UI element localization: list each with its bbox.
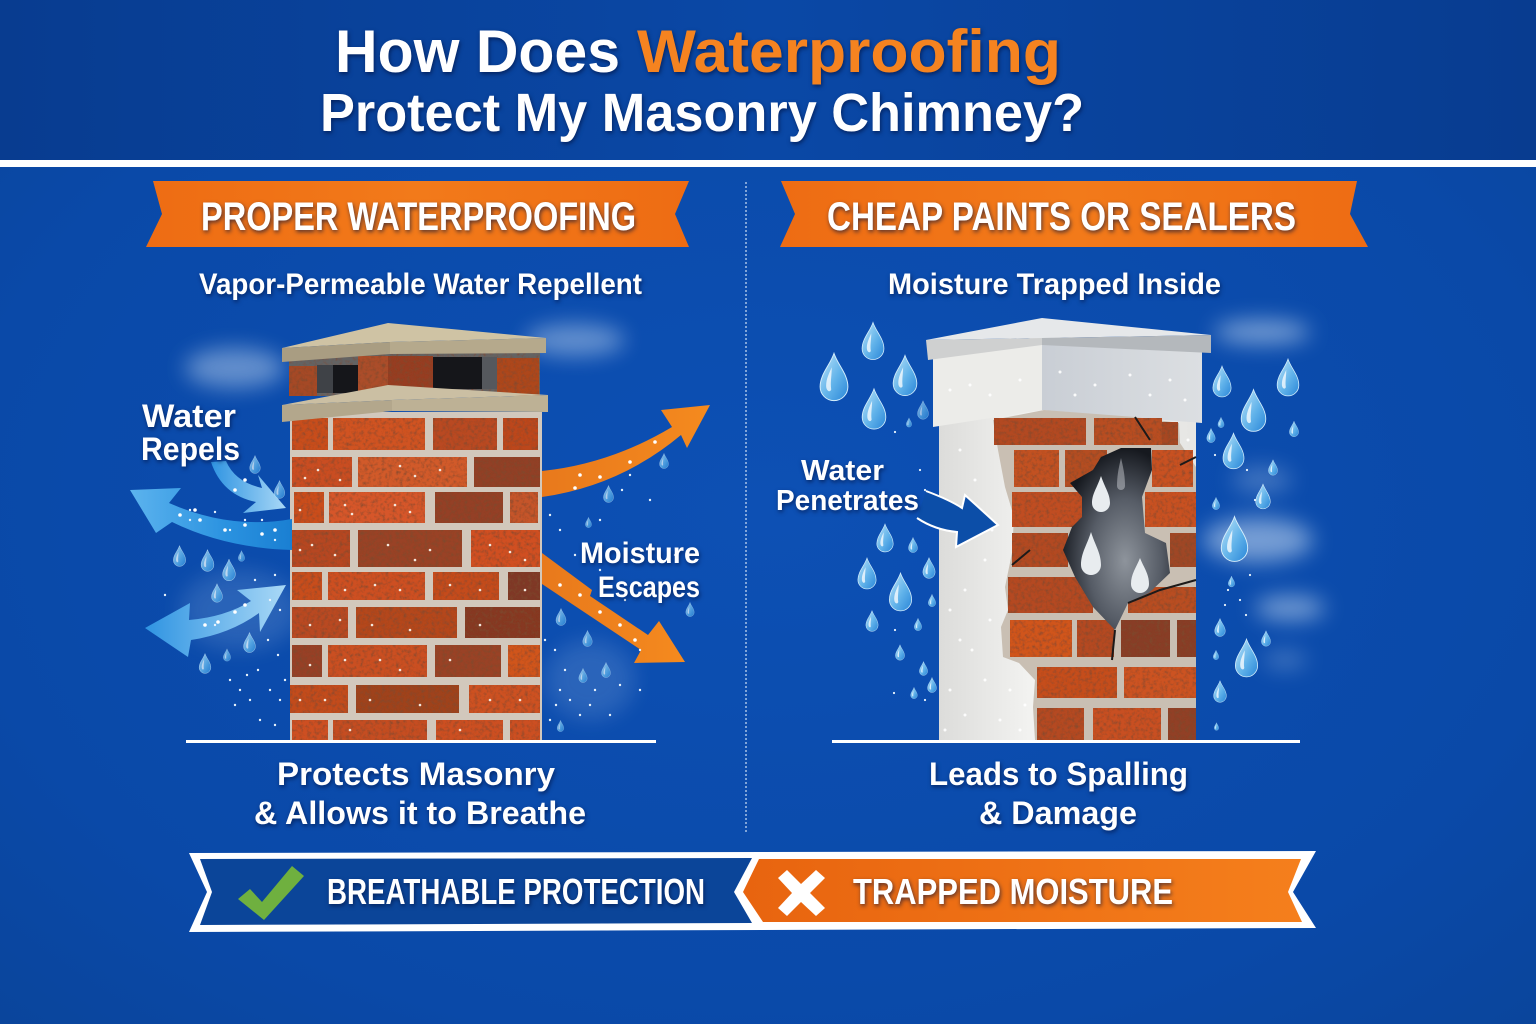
arrow: water inbound	[211, 461, 286, 513]
right caption: & Damage	[979, 795, 1137, 831]
mist behind left chimney	[180, 324, 635, 720]
bottom comparison banner	[189, 851, 1316, 932]
arrow: moisture down	[542, 553, 685, 663]
banner outline	[189, 851, 1316, 932]
bricks	[290, 418, 540, 740]
title: How Does	[335, 18, 620, 85]
label: water penetrates: Water	[801, 455, 884, 487]
label: water repels: Repels	[141, 431, 240, 467]
mist right	[1203, 320, 1325, 668]
left banner	[146, 181, 689, 247]
right banner	[780, 181, 1368, 247]
top cap	[282, 323, 546, 362]
left base line	[186, 740, 656, 743]
panel: proper waterproofing	[130, 181, 710, 831]
right base line	[832, 740, 1300, 743]
beads on arrows	[180, 442, 655, 640]
icon: check	[238, 866, 304, 920]
lower cap	[282, 385, 548, 422]
arrow: water repelled top	[130, 488, 292, 550]
icon: cross	[778, 870, 825, 916]
droplets in hole	[1081, 458, 1149, 593]
label: water penetrates: Penetrates	[776, 485, 919, 517]
cracks	[1012, 417, 1196, 660]
exposed brick area	[993, 410, 1196, 740]
rain drops right side	[1207, 359, 1299, 730]
orange segment	[743, 859, 1302, 922]
arrow: water double	[145, 585, 286, 657]
vent openings	[317, 357, 497, 393]
right banner: CHEAP PAINTS OR SEALERS	[827, 195, 1296, 239]
right caption: Leads to Spalling	[929, 756, 1188, 792]
label: moisture escapes	[580, 537, 700, 604]
left spray speckle	[165, 475, 675, 725]
left water droplets	[173, 453, 694, 732]
trapped label: TRAPPED MOISTURE	[853, 871, 1173, 912]
rain drops left side	[820, 322, 936, 699]
left caption: & Allows it to Breathe	[254, 795, 586, 831]
upper brick course	[289, 352, 540, 396]
left banner: PROPER WATERPROOFING	[201, 195, 636, 239]
left caption: Protects Masonry	[277, 756, 555, 792]
bricks right	[994, 418, 1196, 740]
label: moisture escapes: Escapes	[598, 571, 700, 604]
white body	[939, 410, 1196, 740]
left caption	[254, 756, 586, 831]
label: water repels: Water	[142, 398, 236, 434]
left labels	[141, 398, 700, 604]
right subtitle: Moisture Trapped Inside	[888, 268, 1221, 301]
header divider	[0, 160, 1536, 167]
label: moisture escapes: Moisture	[580, 537, 700, 570]
mortar body	[290, 412, 542, 740]
label: water penetrates	[776, 455, 919, 517]
right chimney	[926, 318, 1211, 740]
blue segment	[200, 858, 752, 925]
right caption	[929, 756, 1188, 831]
upper white band	[933, 336, 1202, 427]
white cap	[926, 318, 1211, 360]
center divider	[745, 182, 747, 834]
left subtitle: Vapor-Permeable Water Repellent	[199, 268, 642, 301]
breathable label: BREATHABLE PROTECTION	[327, 871, 705, 912]
beads on white paint	[945, 372, 1188, 730]
left chimney	[282, 323, 548, 740]
header band	[0, 0, 1536, 160]
rain speckle	[894, 432, 1255, 700]
title: Protect My Masonry Chimney?	[320, 83, 1084, 143]
water beads on bricks	[300, 466, 525, 730]
title	[320, 18, 1084, 143]
damage hole	[1063, 448, 1170, 630]
arrow: moisture up	[542, 405, 710, 497]
label: water repels	[141, 398, 240, 467]
arrow: water penetrates	[917, 491, 998, 547]
title: Waterproofing	[637, 18, 1061, 85]
panel: cheap paints or sealers	[776, 181, 1368, 831]
